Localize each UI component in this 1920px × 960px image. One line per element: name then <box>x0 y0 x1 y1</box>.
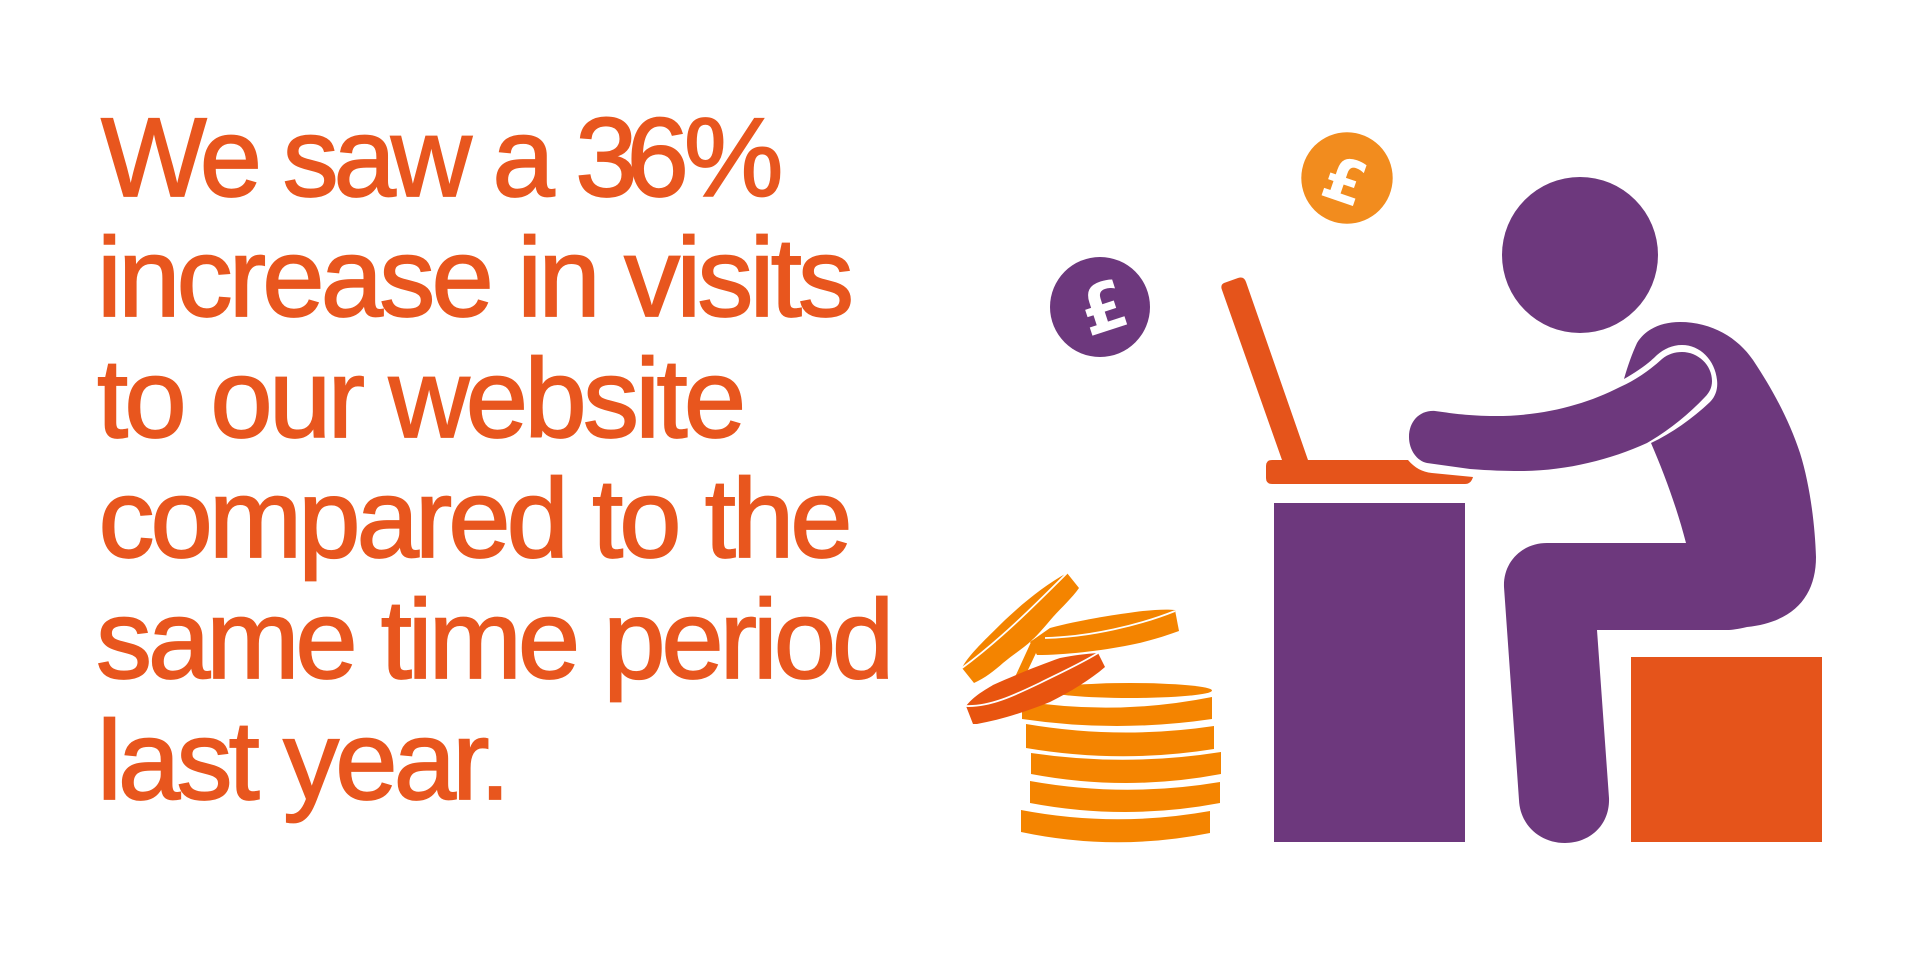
body and leg <box>1504 322 1816 843</box>
hidden coin leg <box>1015 640 1036 677</box>
stack band 5 <box>1021 810 1210 842</box>
headline line 5: same time period <box>96 577 890 702</box>
laptop base <box>1266 460 1473 484</box>
headline text <box>96 95 890 823</box>
headline line 4: compared to the <box>98 456 849 581</box>
laptop screen <box>1221 278 1308 460</box>
tilted coin top <box>962 573 1079 683</box>
headline line 3: to our website <box>97 336 742 461</box>
headline line 6: last year. <box>97 698 507 823</box>
icon: stack of coins <box>962 573 1221 842</box>
head <box>1502 177 1658 333</box>
icon: laptop <box>1221 278 1473 484</box>
headline line 2: increase in visits <box>97 215 850 340</box>
tilted coin middle <box>1030 610 1179 655</box>
stack band 1 <box>1022 697 1212 726</box>
tilted dark coin <box>966 653 1105 724</box>
stack band 3 <box>1031 752 1221 783</box>
desk block <box>1274 503 1465 842</box>
stack band 2 <box>1026 724 1214 756</box>
icon: orange pound coin: £ <box>1313 142 1375 222</box>
icon: orange pound coin <box>1301 132 1393 224</box>
coin stack top surface <box>1048 683 1212 698</box>
icon: purple pound coin: £ <box>1070 265 1137 352</box>
seat block <box>1631 657 1822 842</box>
arm <box>1409 352 1712 471</box>
stack band 4 <box>1030 781 1220 812</box>
figure: seated person <box>1409 177 1816 843</box>
headline line 1: We saw a 36% <box>101 95 780 220</box>
icon: purple pound coin <box>1050 257 1150 357</box>
